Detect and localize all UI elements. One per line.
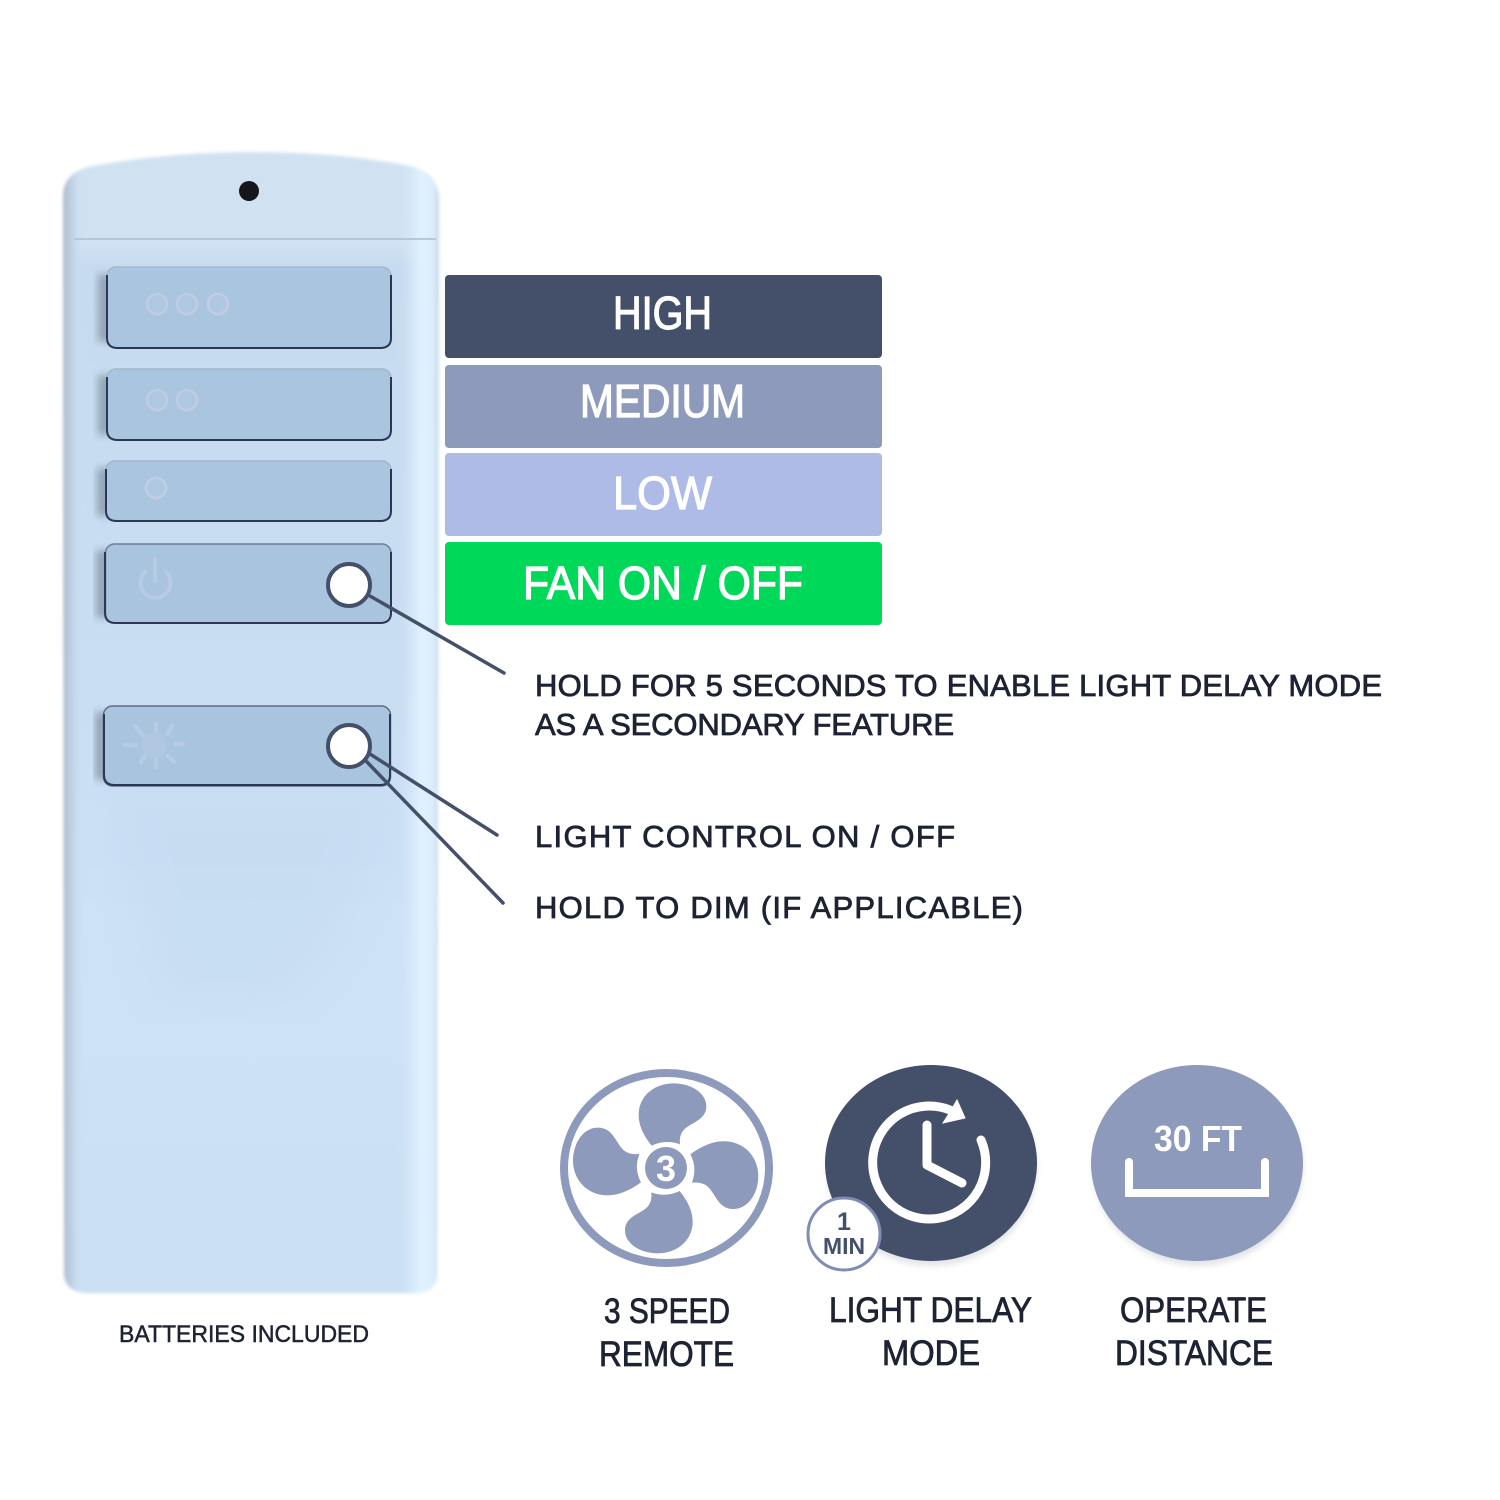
text: light control: LIGHT CONTROL ON / OFF: [535, 819, 955, 854]
callout lines: [367, 596, 504, 903]
speed bar: high: [445, 275, 882, 358]
icon: 3 speed fan: [564, 1073, 769, 1263]
button: high speed: [107, 267, 391, 348]
speed bar: medium: [445, 365, 882, 448]
label: light delay mode: MODE: [882, 1334, 980, 1373]
text: light delay instructions: HOLD FOR 5 SECONDS TO ENABLE LIGHT DELAY MODE: [535, 668, 1382, 703]
label: light delay mode: LIGHT DELAY: [829, 1291, 1032, 1330]
button: medium speed: [107, 369, 391, 440]
remote control: [63, 152, 439, 1293]
speed bar: fan on/off: FAN ON / OFF: [523, 557, 803, 609]
text: light delay instructions: AS A SECONDARY FEATURE: [535, 707, 954, 742]
icon: light delay clock: [808, 1065, 1037, 1270]
text: batteries included: BATTERIES INCLUDED: [119, 1321, 369, 1348]
badge: 1 min: [808, 1198, 880, 1270]
speed bar: low: [445, 453, 882, 536]
text: light delay instructions: [535, 668, 1382, 742]
badge: 1 min: 1: [837, 1208, 851, 1236]
label: light delay mode: [829, 1291, 1032, 1373]
remote seam line: [74, 238, 436, 240]
remote IR hole: [239, 181, 259, 201]
callout marker: fan button: [328, 564, 370, 606]
remote soft reflection: [110, 790, 395, 1000]
button: light: [104, 706, 390, 786]
button: low speed: [106, 461, 391, 521]
label: 3 speed remote: [599, 1292, 734, 1374]
speed bar: medium: MEDIUM: [580, 375, 745, 427]
remote body: [63, 152, 439, 1293]
button shadows: [95, 274, 112, 780]
label: 3 speed remote: REMOTE: [599, 1335, 734, 1374]
text: dimming: HOLD TO DIM (IF APPLICABLE): [535, 890, 1023, 925]
label: operate distance: [1115, 1291, 1273, 1373]
label: operate distance: DISTANCE: [1115, 1334, 1273, 1373]
speed bar: high: HIGH: [613, 287, 712, 339]
icon: 30 ft distance: 30 FT: [1154, 1118, 1242, 1159]
button: fan power: [105, 544, 391, 623]
icon: 30 ft distance: [1091, 1065, 1303, 1266]
speed bar: fan on/off: [445, 542, 882, 625]
label: operate distance: OPERATE: [1120, 1291, 1267, 1330]
badge: 1 min: MIN: [823, 1233, 865, 1259]
label: 3 speed remote: 3 SPEED: [604, 1292, 730, 1331]
callout marker: light button: [328, 725, 370, 767]
speed bar: low: LOW: [613, 467, 713, 519]
icon: 3 speed fan: 3: [656, 1148, 676, 1189]
